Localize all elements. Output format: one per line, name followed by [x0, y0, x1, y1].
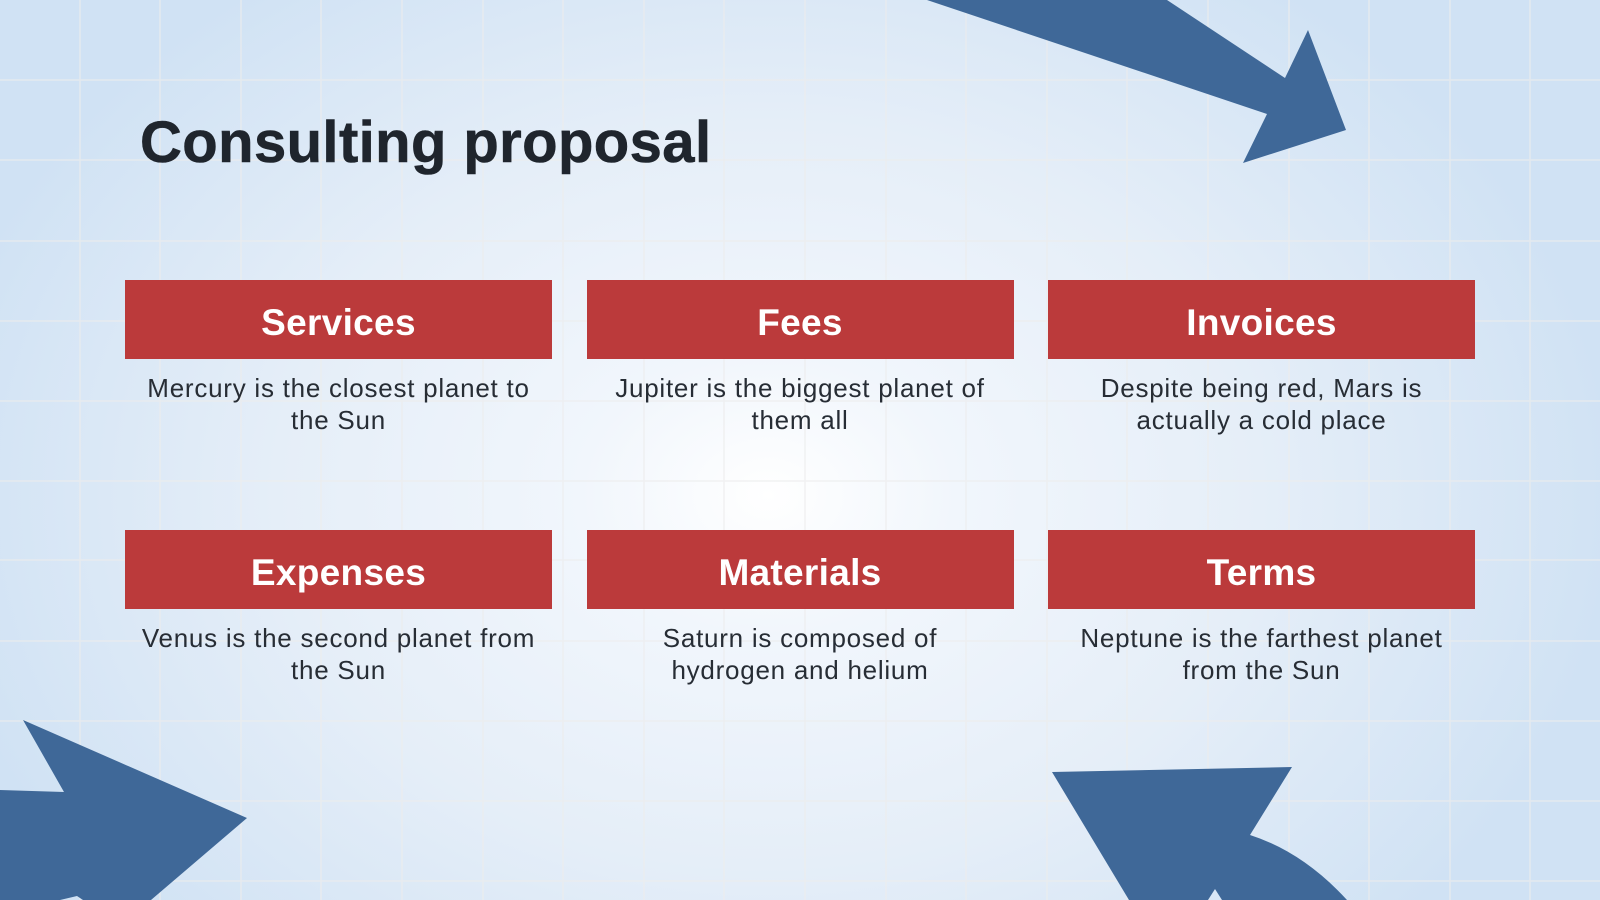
- text: expenses: Venus is the second planet from: [142, 623, 535, 653]
- panel: invoices: [1048, 280, 1475, 435]
- panel: fees: [587, 280, 1014, 435]
- text: services: Mercury is the closest planet to: [147, 373, 530, 403]
- heading: expenses: Expenses: [251, 552, 426, 593]
- text: materials: hydrogen and helium: [671, 655, 929, 685]
- text: terms: from the Sun: [1183, 655, 1340, 685]
- heading: materials: Materials: [718, 552, 882, 593]
- heading: fees: Fees: [757, 302, 843, 343]
- heading: invoices: Invoices: [1186, 302, 1337, 343]
- text: invoices: actually a cold place: [1137, 405, 1386, 435]
- heading: terms: Terms: [1207, 552, 1316, 593]
- arrow: bottom right: [1052, 767, 1347, 900]
- text: fees: them all: [751, 405, 849, 435]
- panel: materials: [587, 530, 1014, 685]
- arrow: top right: [927, 0, 1346, 163]
- heading: services: [125, 280, 552, 359]
- arrow: bottom left: [0, 720, 247, 900]
- text: invoices: [1101, 373, 1422, 435]
- panel: services: [125, 280, 552, 435]
- panel: terms: [1048, 530, 1475, 685]
- text: materials: [663, 623, 937, 685]
- panel: expenses: [125, 530, 552, 685]
- heading: fees: [586, 280, 1014, 359]
- text: services: the Sun: [291, 405, 386, 435]
- text: fees: Jupiter is the biggest planet of: [615, 373, 985, 403]
- heading: invoices: [1048, 280, 1475, 359]
- title: Consulting proposal: [140, 110, 711, 175]
- heading: services: Services: [261, 302, 416, 343]
- text: services: [147, 373, 530, 435]
- text: terms: Neptune is the farthest planet: [1080, 623, 1443, 653]
- heading: materials: [586, 530, 1014, 609]
- text: materials: Saturn is composed of: [663, 623, 937, 653]
- heading: expenses: [125, 530, 552, 609]
- text: terms: [1080, 623, 1443, 685]
- heading: terms: [1048, 530, 1475, 609]
- text: expenses: [142, 623, 535, 685]
- text: invoices: Despite being red, Mars is: [1101, 373, 1422, 403]
- text: fees: [615, 373, 985, 435]
- text: expenses: the Sun: [291, 655, 386, 685]
